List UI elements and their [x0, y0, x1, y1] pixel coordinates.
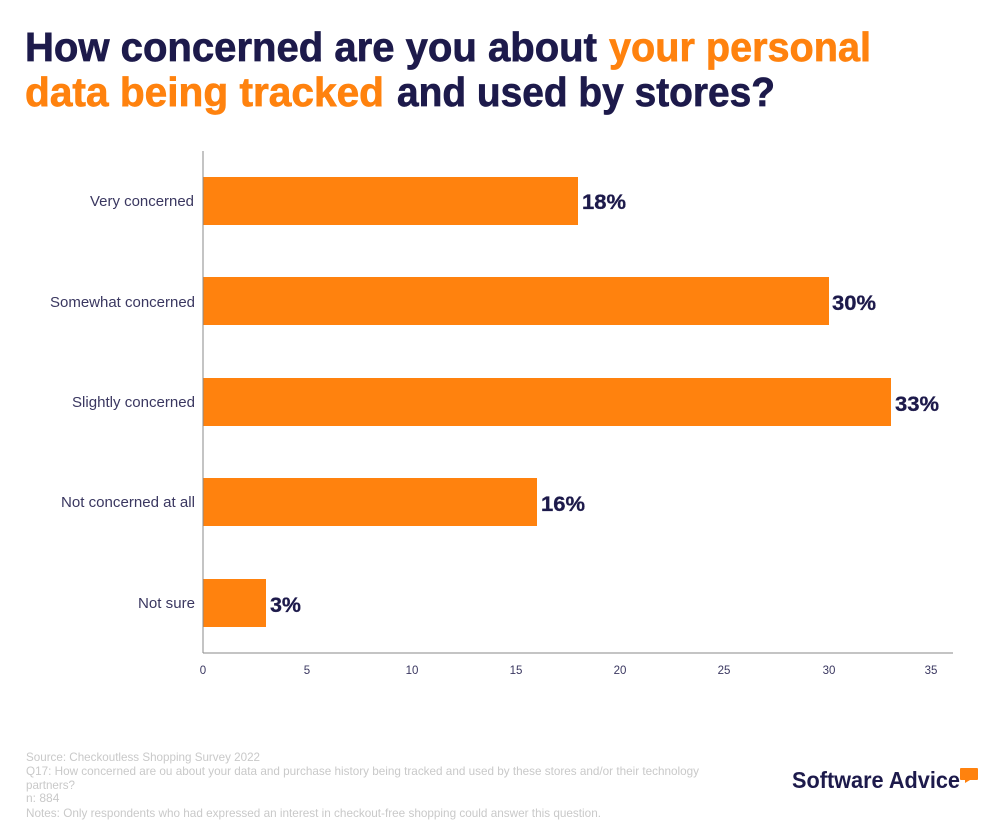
title: and used by stores? [397, 69, 775, 115]
category labels: Very concerned [90, 193, 194, 210]
bar chart [50, 151, 953, 677]
title: data being tracked [25, 69, 384, 115]
value labels: 33% [895, 393, 939, 416]
x axis ticks: 5 [304, 665, 310, 677]
source notes: partners? [26, 778, 75, 792]
category labels: Slightly concerned [72, 394, 195, 411]
x axis ticks: 30 [823, 665, 835, 677]
source notes: Notes: Only respondents who had expressed an interest in checkout-free shopping could answer this question. [26, 806, 601, 820]
title: How concerned are you about [25, 24, 597, 70]
icon: speech bubble [960, 768, 978, 783]
value labels: 16% [541, 493, 585, 516]
x axis ticks: 25 [718, 665, 730, 677]
category labels: Not concerned at all [61, 494, 195, 511]
x axis ticks [200, 665, 937, 677]
x axis ticks: 35 [925, 665, 937, 677]
category labels [50, 193, 195, 612]
x axis ticks: 20 [614, 665, 626, 677]
category labels: Somewhat concerned [50, 294, 195, 311]
source notes [26, 750, 699, 820]
value labels: 18% [582, 191, 626, 214]
value labels: 30% [832, 292, 876, 315]
value labels: 3% [270, 594, 301, 617]
source notes: n: 884 [26, 791, 60, 805]
axes [203, 151, 953, 653]
x axis ticks: 15 [510, 665, 522, 677]
x axis ticks: 10 [406, 665, 418, 677]
source notes: Q17: How concerned are ou about your data and purchase history being tracked and used by these stores and/or their technology [26, 764, 699, 778]
category labels: Not sure [138, 595, 195, 612]
x axis ticks: 0 [200, 665, 206, 677]
title [25, 24, 871, 115]
source notes: Source: Checkoutless Shopping Survey 2022 [26, 750, 260, 764]
title: your personal [609, 24, 871, 70]
value labels [270, 191, 939, 617]
bars [203, 177, 891, 627]
logo: Software Advice: Software Advice [792, 767, 960, 793]
